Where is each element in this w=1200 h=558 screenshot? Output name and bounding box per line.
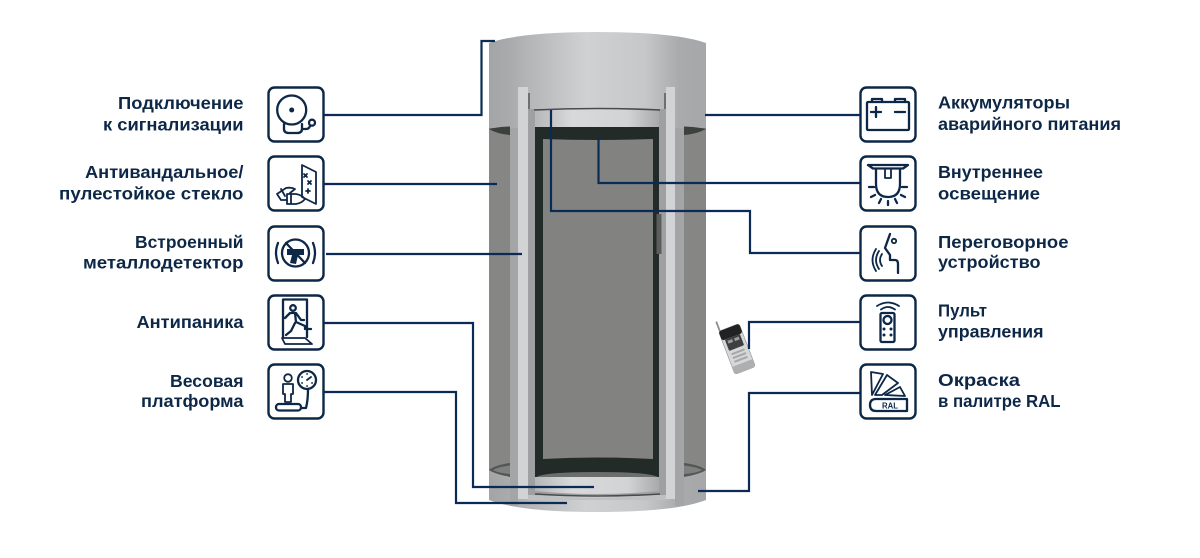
top drum	[489, 32, 706, 128]
icon: RAL palette	[860, 364, 916, 418]
right label: remote	[938, 300, 1044, 342]
right label: batteries: аварийного питания	[938, 114, 1121, 134]
left label: alarm connection: Подключение	[118, 93, 244, 113]
remote control device	[715, 314, 756, 374]
door frame	[535, 127, 659, 478]
left label: metal detector: Встроенный	[135, 232, 244, 252]
leader lines	[324, 41, 860, 503]
icon: battery	[860, 88, 916, 142]
right label: lighting: Внутреннее	[938, 162, 1043, 182]
bottom wedges	[489, 463, 706, 477]
right label: remote: управления	[938, 322, 1044, 342]
top wedges	[489, 126, 706, 135]
icon: remote	[860, 296, 916, 350]
left label: glass	[59, 162, 244, 204]
icon: intercom speech	[860, 226, 916, 280]
icon: alarm bell	[268, 88, 324, 142]
icon: weight platform	[268, 364, 324, 418]
icon: RAL palette: RAL	[882, 402, 898, 410]
right label: batteries: Аккумуляторы	[938, 92, 1070, 112]
threshold ellipse	[535, 472, 659, 478]
left label: alarm connection: к сигнализации	[103, 114, 244, 134]
icon: metal detector	[268, 226, 324, 280]
right label: remote: Пульт	[938, 300, 987, 320]
icon: bulletproof glass	[268, 156, 324, 210]
left label: weight platform: платформа	[141, 391, 244, 411]
door handle	[656, 214, 662, 254]
left label: glass: пулестойкое стекло	[59, 184, 244, 204]
door glass	[543, 139, 653, 459]
left label: glass: Антивандальное/	[85, 162, 244, 182]
left post	[510, 128, 518, 506]
upper inner band	[535, 108, 659, 128]
right label: batteries	[938, 92, 1121, 134]
right label: RAL paint: Окраска	[938, 370, 1020, 390]
cabin glass body	[489, 126, 706, 476]
right label: RAL paint	[938, 370, 1061, 411]
left label: alarm connection	[103, 93, 244, 134]
drum surface under door	[528, 495, 666, 500]
right label: RAL paint: в палитре RAL	[938, 391, 1061, 411]
bottom drum	[489, 470, 706, 512]
left label: anti-panic: Антипаника	[136, 312, 244, 332]
icon: interior light	[860, 156, 916, 210]
inner opening	[528, 109, 666, 495]
right label: intercom: Переговорное	[938, 232, 1069, 252]
left label: metal detector	[83, 232, 244, 272]
right post	[666, 87, 675, 499]
lower inner band	[535, 477, 659, 494]
icon: emergency exit	[268, 296, 324, 350]
left label: weight platform: Весовая	[170, 371, 244, 391]
left label: weight platform	[141, 371, 244, 411]
right label: lighting	[938, 162, 1043, 204]
right label: intercom: устройство	[938, 252, 1040, 272]
shadow beside inner drum	[528, 93, 530, 109]
right label: intercom	[938, 232, 1069, 272]
right label: lighting: освещение	[938, 184, 1040, 204]
door cabin illustration	[489, 32, 706, 512]
left label: metal detector: металлодетектор	[83, 252, 244, 272]
